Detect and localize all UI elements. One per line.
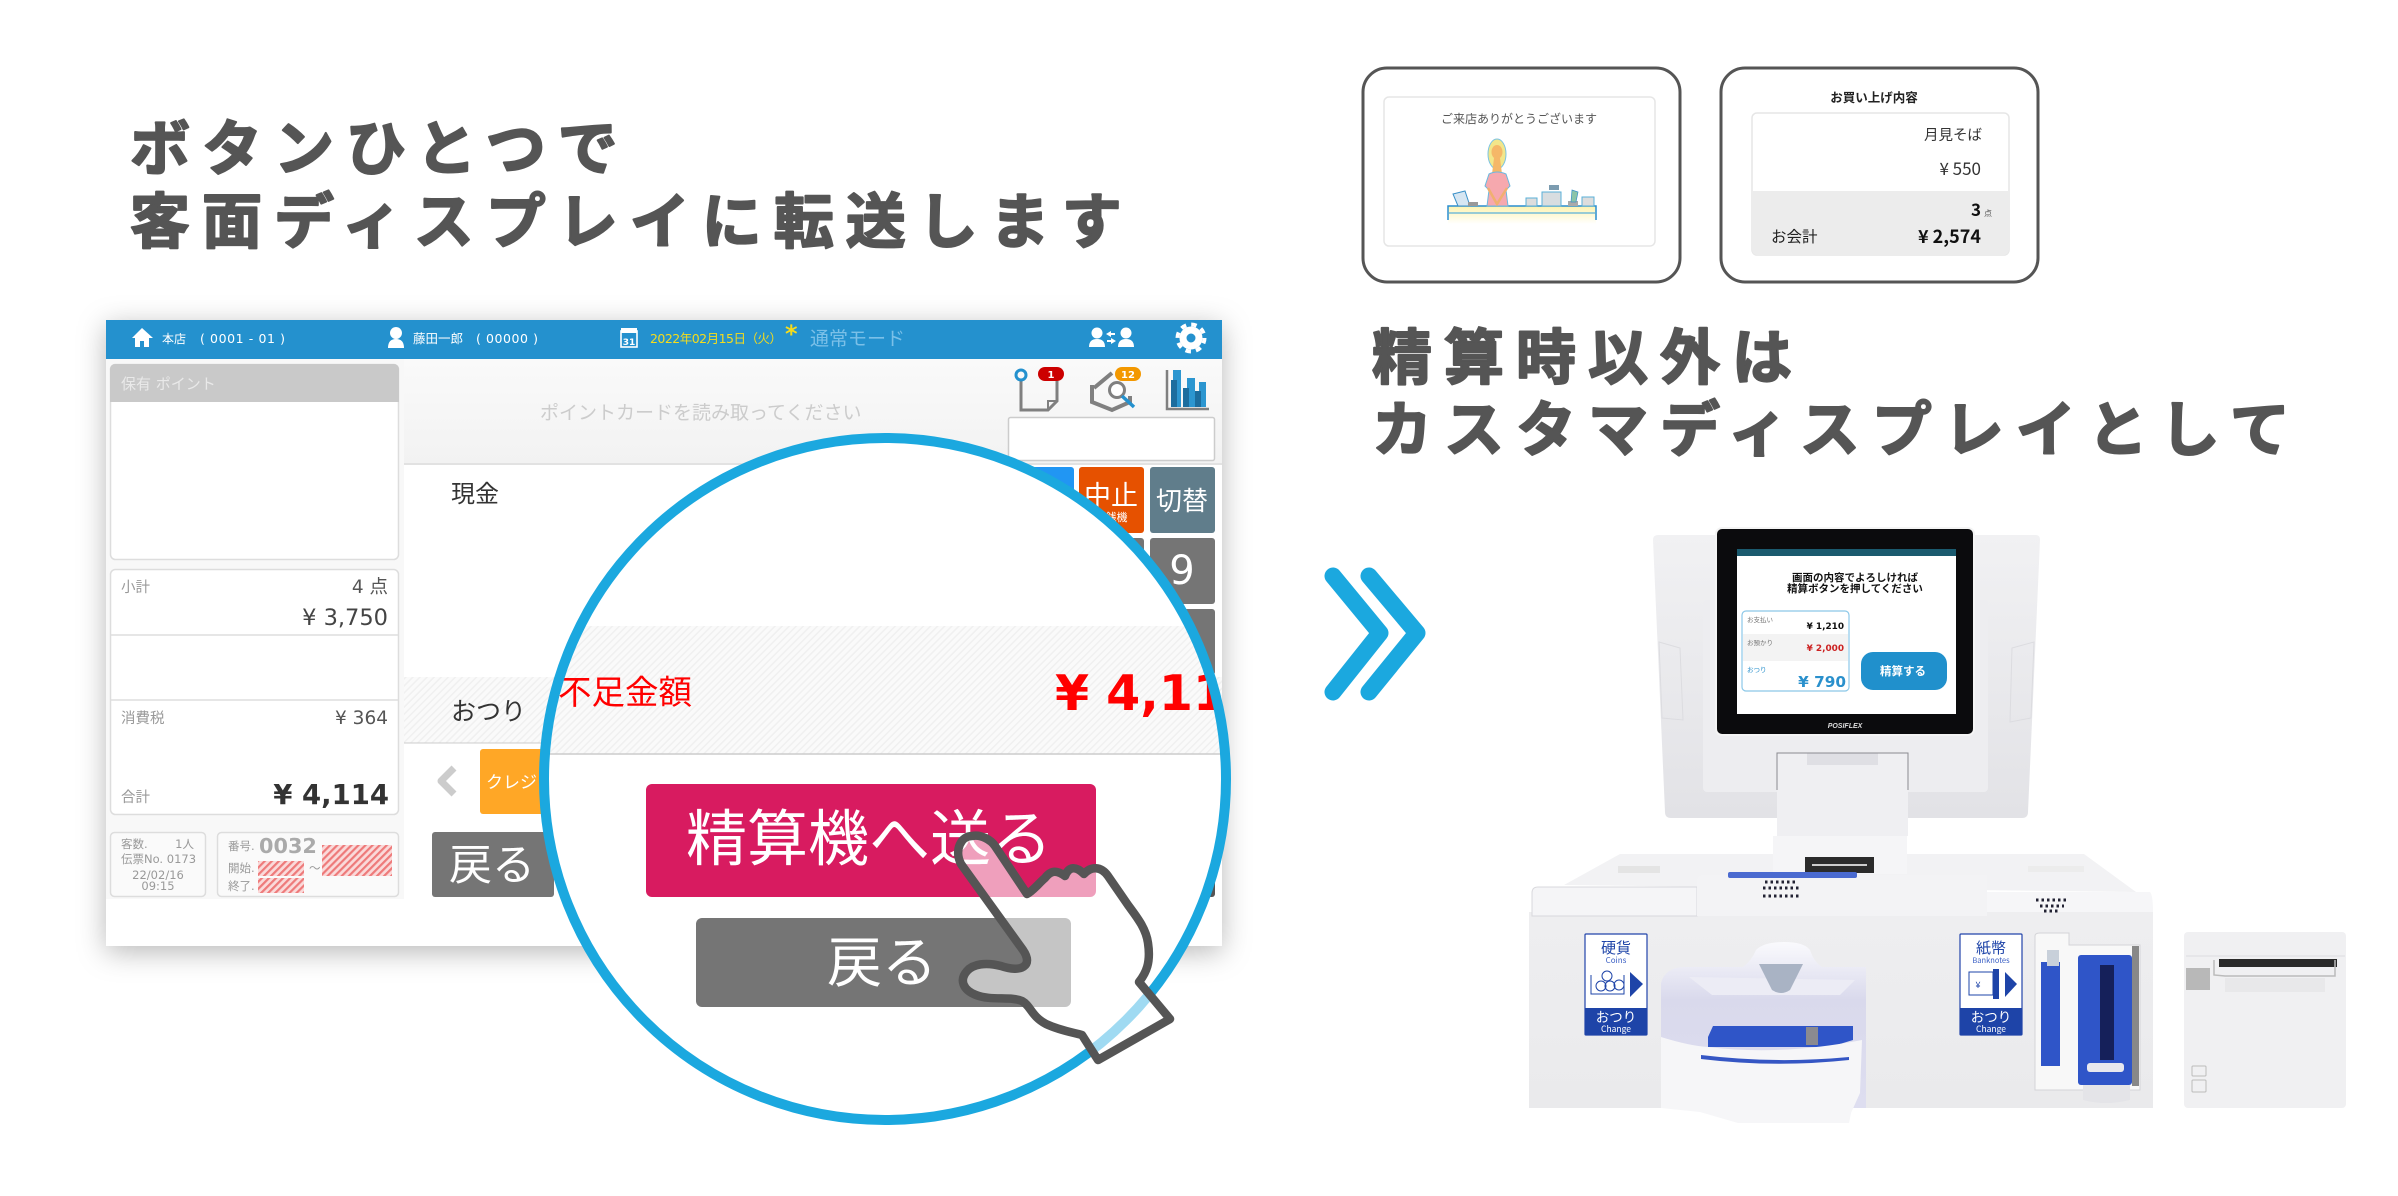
icon: coins in tray <box>1591 971 1624 994</box>
button: back <box>432 832 554 897</box>
label: banknotes change <box>1960 934 2022 1035</box>
staff name: ( 00000 ) <box>476 331 538 346</box>
store name: 本店 <box>162 332 186 346</box>
icon: user switch <box>1089 328 1134 347</box>
store name: ( 0001 - 01 ) <box>200 331 285 346</box>
input box <box>1008 418 1214 460</box>
card: totals: 合計 <box>121 789 150 806</box>
asterisk: * <box>785 320 798 348</box>
label: coins change: おつり <box>1596 1006 1636 1026</box>
magnifier circle <box>530 438 1261 1120</box>
payment summary box <box>1742 611 1849 691</box>
staff name: 藤田一郎 <box>413 331 463 346</box>
item card: お会計 <box>1771 225 1818 247</box>
monitor logo: POSIFLEX <box>1828 723 1864 730</box>
header bar <box>106 320 1222 359</box>
icon: calendar: 31 <box>623 338 635 348</box>
panel: welcome screen <box>1363 68 1680 282</box>
card: totals: 小計 <box>121 579 150 596</box>
button: credit: クレジット <box>486 773 571 793</box>
label: banknotes change: Banknotes <box>1972 955 2010 966</box>
label: cash: 現金 <box>451 480 499 508</box>
button: send to payment machine: 精算機へ送る <box>686 804 1052 875</box>
screen title: お買い上げ内容 <box>1830 87 1918 106</box>
keypad buttons: 9 <box>1169 548 1195 594</box>
coin tray <box>1661 942 1866 1123</box>
keypad buttons: 切替 <box>1156 487 1208 517</box>
machine: monitor and stand <box>1653 528 2040 876</box>
payment summary box: お預かり <box>1747 638 1773 647</box>
icon: left arrow <box>441 768 454 794</box>
label: banknotes change: おつり <box>1971 1006 2011 1026</box>
icon: double chevron arrow <box>1333 576 1417 692</box>
button: back (zoomed) <box>696 918 1071 1007</box>
payment summary box: ¥ 790 <box>1798 673 1846 691</box>
speaker grilles <box>1763 882 2068 911</box>
banknote dispenser <box>2035 933 2140 1103</box>
panel: POS register screen <box>106 320 1222 946</box>
top flaps <box>1532 866 2153 916</box>
box: receipt number: 番号. <box>228 839 255 853</box>
button: credit <box>480 749 580 814</box>
pay button: 精算する <box>1880 664 1926 678</box>
change band: おつり <box>451 697 526 726</box>
mode: 通常モード <box>810 328 905 350</box>
box: receipt number <box>218 832 398 896</box>
staff name <box>413 331 538 346</box>
heading: customer display: カスタマディスプレイとして <box>1372 397 2302 464</box>
label: coins change: 硬貨 <box>1601 937 1631 958</box>
label: coins change: Coins <box>1606 955 1627 966</box>
card: totals: 消費税 <box>121 710 165 727</box>
card: totals: 4 点 <box>352 577 388 598</box>
title: send to customer display: 客面ディスプレイに転送します <box>130 189 1134 256</box>
icon: note with badge: 1 <box>1048 370 1055 381</box>
card: totals: ¥ 3,750 <box>302 605 388 631</box>
keypad buttons <box>1011 467 1215 897</box>
receipt printer <box>2184 932 2346 1108</box>
box: slip info: 22/02/16 <box>132 868 184 882</box>
payment summary box: お支払い <box>1747 615 1773 624</box>
icon: house search with badge: 12 <box>1121 370 1135 381</box>
change band <box>404 677 1222 743</box>
shortage band: ¥ 4,114 <box>1055 665 1261 722</box>
icon: house search with badge <box>1092 367 1141 410</box>
inner welcome card <box>1384 97 1655 246</box>
welcome text: ご来店ありがとうございます <box>1441 110 1597 127</box>
box: slip info: 客数. <box>121 837 148 851</box>
item card: 点 <box>1984 208 1992 219</box>
stand <box>1773 753 1908 876</box>
payment summary box: ¥ 1,210 <box>1807 622 1844 632</box>
heading: customer display <box>1372 325 2302 464</box>
customer screen <box>1737 549 1956 714</box>
box: receipt number: 終了. <box>228 879 255 893</box>
left column background <box>106 359 404 899</box>
customer screen: 精算ボタンを押してください <box>1787 582 1923 595</box>
icon: user <box>388 327 404 348</box>
icon: pointing hand <box>958 836 1170 1060</box>
box: slip info: 1人 <box>175 837 194 851</box>
label: coins change: Change <box>1601 1023 1631 1035</box>
customer screen: 画面の内容でよろしければ <box>1792 571 1918 584</box>
payment summary box: ¥ 2,000 <box>1807 644 1844 654</box>
item card: ¥ 2,574 <box>1918 223 1981 249</box>
button: back: 戻る <box>449 841 535 891</box>
arrow <box>1630 972 1643 997</box>
title: send to customer display <box>130 116 1134 256</box>
arrow <box>2005 972 2017 997</box>
date: 2022年02月15日（火） <box>650 331 782 346</box>
heading: customer display: 精算時以外は <box>1372 325 1804 392</box>
icon: bar chart <box>1167 370 1209 409</box>
label: banknotes change: 紙幣 <box>1976 937 2006 958</box>
label: banknotes change: Change <box>1976 1023 2006 1035</box>
card: points: 保有 ポイント <box>121 375 216 393</box>
card: totals: ¥ 4,114 <box>273 779 389 811</box>
item card: ¥ 550 <box>1939 155 1981 180</box>
item card: 月見そば <box>1924 124 1982 145</box>
item card: 3 <box>1971 196 1981 221</box>
icon: banknotes: ¥ <box>1976 978 1980 991</box>
keypad buttons: 釣銭機 <box>1094 510 1128 524</box>
illustration: clerk at counter <box>1448 139 1596 224</box>
box: receipt number: 開始. <box>228 861 255 875</box>
shortage band: 不足金額 <box>558 673 692 712</box>
icon: note with badge <box>1016 367 1064 410</box>
shortage band <box>530 626 1261 754</box>
button: back (zoomed): 戻る <box>827 931 937 995</box>
icon: calendar <box>621 328 637 348</box>
card: totals <box>110 570 399 814</box>
printer buttons <box>2192 1066 2206 1092</box>
panel: purchase details screen <box>1721 68 2038 282</box>
monitor bezel <box>1716 528 1974 735</box>
card prompt area <box>404 359 1222 465</box>
title: send to customer display: ボタンひとつで <box>130 116 630 183</box>
box: slip info: 伝票No. 0173 <box>121 852 196 866</box>
box: slip info <box>110 832 206 896</box>
store name <box>162 331 285 346</box>
item card <box>1752 113 2009 255</box>
card: points <box>110 364 399 560</box>
box: receipt number: 0032 <box>259 834 317 858</box>
card prompt area: ポイントカードを読み取ってください <box>540 402 861 424</box>
keypad buttons: 中止 <box>1084 481 1138 512</box>
icon: settings gear <box>1178 324 1204 352</box>
box: slip info: 09:15 <box>141 879 175 893</box>
label: coins change <box>1585 934 1647 1035</box>
box: receipt number: ～ <box>309 861 321 875</box>
machine: payment unit body <box>1529 854 2153 1108</box>
pay button <box>1861 652 1947 690</box>
card: totals: ¥ 364 <box>335 708 388 729</box>
icon: home <box>132 328 153 347</box>
button: send to payment machine <box>646 784 1096 897</box>
payment summary box: おつり <box>1747 666 1766 674</box>
